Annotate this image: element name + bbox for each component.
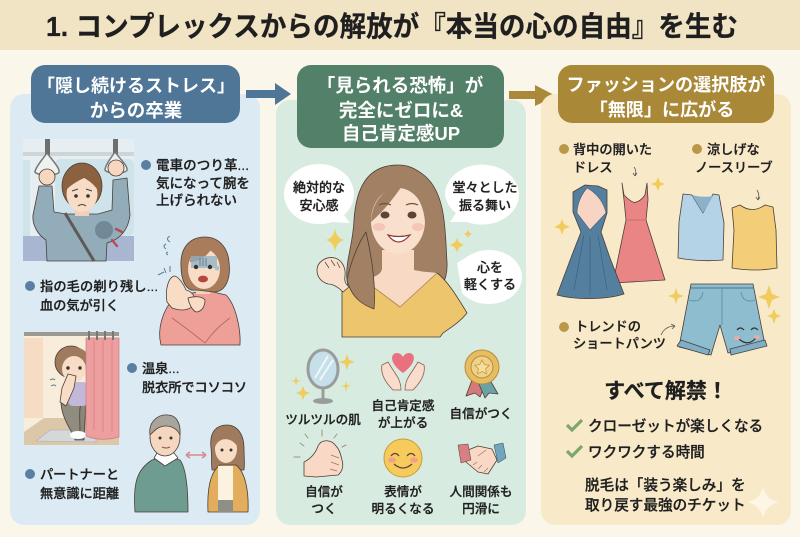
sparkle: pale — [747, 487, 779, 518]
item: hot spring: 脱衣所でコソコソ — [142, 380, 247, 395]
item: train strap — [141, 157, 250, 208]
illustration: blue dress — [557, 185, 624, 299]
illustration: worried woman — [158, 236, 240, 345]
label: gain confidence 2: つく — [311, 502, 337, 516]
item: backless dress: ドレス — [573, 160, 613, 175]
arrow: gold — [509, 85, 556, 106]
label: brighter expression — [372, 484, 434, 516]
closing text: 取り戻す最強のチケット — [585, 497, 746, 514]
header: stress — [31, 65, 240, 123]
illustration: yellow top — [732, 190, 777, 270]
label: gain confidence: 自信がつく — [450, 406, 512, 421]
illustration: smiling woman — [317, 165, 467, 337]
header: fashion: ファッションの選択肢が — [566, 74, 766, 95]
checklist: クローゼットが楽しくなる — [588, 417, 763, 435]
panel: confidence — [276, 65, 526, 525]
header: confidence: 「見られる恐怖」が — [317, 75, 484, 96]
item: train strap: 気になって腕を — [156, 176, 250, 191]
item: short pants — [559, 319, 675, 351]
label: smooth skin: ツルツルの肌 — [285, 413, 361, 427]
icon: handshake — [458, 443, 506, 474]
icon: medal — [465, 350, 499, 398]
header: confidence — [297, 65, 504, 148]
item: backless dress: 背中の開いた — [573, 141, 652, 157]
arrow: blue — [246, 83, 291, 105]
speech bubble: absolute relief: 絶対的な — [293, 180, 345, 195]
item: sleeveless: 涼しげな — [707, 142, 760, 157]
title band — [0, 0, 800, 50]
header: confidence: 完全にゼロに& — [339, 100, 463, 121]
label: relationships: 円滑に — [462, 501, 500, 516]
item: train strap: 上げられない — [156, 193, 237, 208]
sparkles — [326, 228, 472, 253]
item: short pants: トレンドの — [575, 319, 641, 334]
illustration: woman hiding behind curtain — [24, 331, 119, 445]
header: stress: 「隠し続けるストレス」 — [37, 75, 235, 96]
closing text — [585, 477, 746, 514]
icon: fist — [294, 430, 346, 477]
icon: mirror — [291, 350, 355, 404]
item: short pants: ショートパンツ — [573, 336, 666, 351]
speech bubble: lighter heart: 心を — [477, 260, 503, 275]
item: backless dress — [559, 141, 652, 175]
speech bubble: dignified manner — [445, 165, 519, 225]
panel: fashion — [541, 65, 791, 525]
label: gain confidence 2: 自信が — [305, 484, 343, 499]
illustration: couple at a distance — [134, 415, 248, 512]
label: self esteem: が上がる — [378, 415, 428, 430]
label: relationships — [450, 485, 512, 516]
illustration: pink dress — [613, 167, 665, 283]
header: stress: からの卒業 — [90, 100, 183, 121]
label: gain confidence 2 — [305, 484, 343, 516]
item: finger hair — [25, 278, 158, 313]
label: self esteem — [372, 398, 435, 430]
checklist — [567, 417, 763, 461]
title: 1. コンプレックスからの解放が『本当の心の自由』を生む — [46, 10, 738, 42]
item: hot spring: 温泉... — [142, 360, 179, 376]
item: finger hair: 血の気が引く — [40, 297, 119, 313]
item: sleeveless — [692, 142, 773, 175]
speech bubble: absolute relief — [284, 164, 354, 224]
item: partner: 無意識に距離 — [40, 485, 119, 501]
illustration: blue top — [678, 194, 724, 261]
header: fashion — [558, 65, 774, 123]
speech bubble: lighter heart — [456, 250, 522, 304]
label: brighter expression: 表情が — [384, 484, 422, 499]
icon grid — [285, 350, 512, 516]
header: fashion: 「無限」に広がる — [590, 99, 734, 120]
label: brighter expression: 明るくなる — [372, 502, 434, 516]
sparkles — [554, 177, 781, 324]
heading: all lifted: すべて解禁！ — [604, 380, 728, 403]
speech bubble: dignified manner: 堂々とした — [452, 180, 518, 195]
icon: heart in hands — [382, 353, 424, 390]
speech bubble: lighter heart: 軽くする — [464, 277, 516, 292]
illustration: denim shorts — [677, 284, 767, 355]
item: finger hair: 指の毛の剃り残し... — [40, 278, 158, 294]
illustration: man on train — [23, 139, 134, 261]
icon: smiley — [384, 439, 422, 477]
item: partner: パートナーと — [40, 467, 119, 482]
speech bubble: dignified manner: 振る舞い — [459, 198, 511, 213]
checklist: ワクワクする時間 — [588, 444, 705, 461]
speech bubble: absolute relief: 安心感 — [299, 198, 339, 213]
header: confidence: 自己肯定感UP — [342, 123, 460, 144]
item: partner — [25, 467, 119, 501]
item: hot spring — [127, 360, 247, 395]
label: self esteem: 自己肯定感 — [372, 398, 435, 413]
panel: stress — [10, 65, 260, 525]
label: relationships: 人間関係も — [450, 485, 512, 499]
item: train strap: 電車のつり革... — [156, 157, 249, 173]
closing text: 脱毛は「装う楽しみ」を — [585, 477, 746, 494]
item: sleeveless: ノースリーブ — [695, 159, 773, 175]
